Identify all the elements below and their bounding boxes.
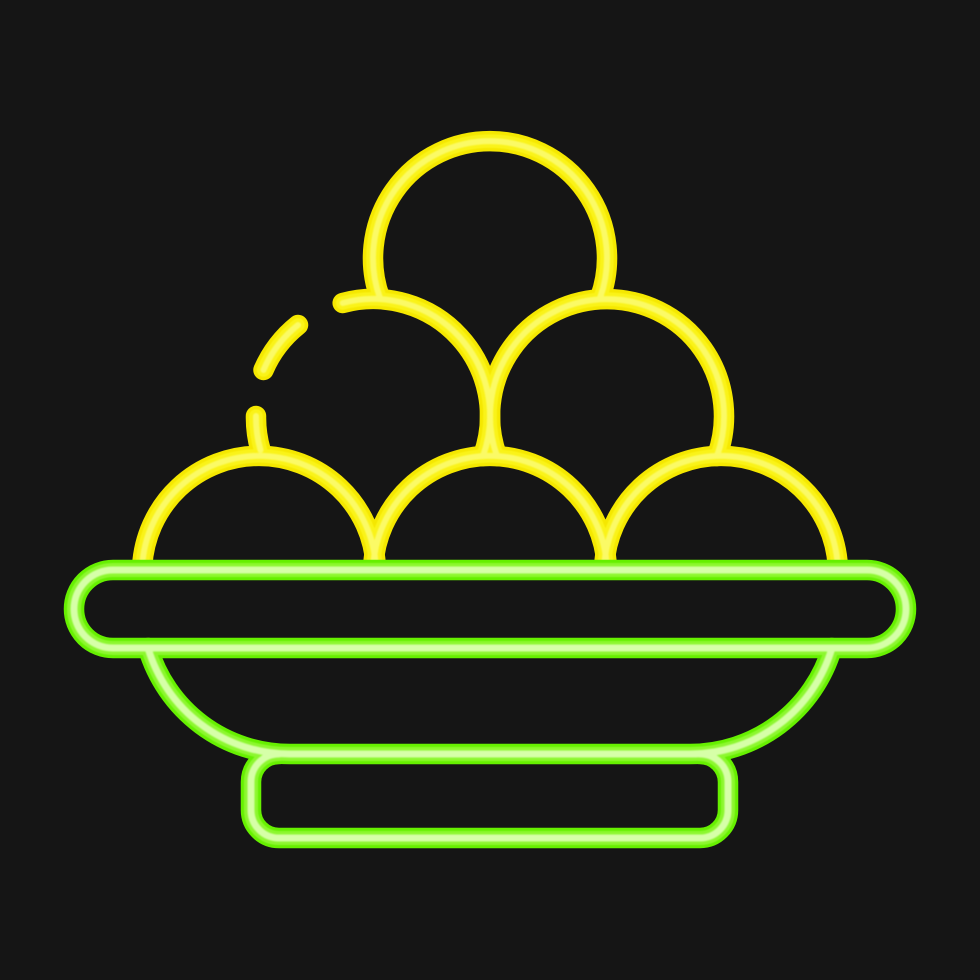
bottom right sweet: [604, 456, 838, 566]
middle left sweet lower dash: [256, 416, 260, 450]
middle left sweet upper dash: [264, 325, 298, 370]
icon: stack of sweets: [142, 141, 838, 566]
bowl rim: [74, 570, 906, 648]
bottom left sweet: [142, 456, 376, 566]
icon: bowl: [74, 570, 906, 838]
top sweet: [373, 141, 607, 298]
bowl foot: [251, 754, 728, 838]
bowl body: [148, 648, 832, 754]
middle right sweet: [490, 299, 724, 456]
bottom middle sweet: [373, 456, 607, 566]
middle left sweet arc: [343, 299, 490, 456]
